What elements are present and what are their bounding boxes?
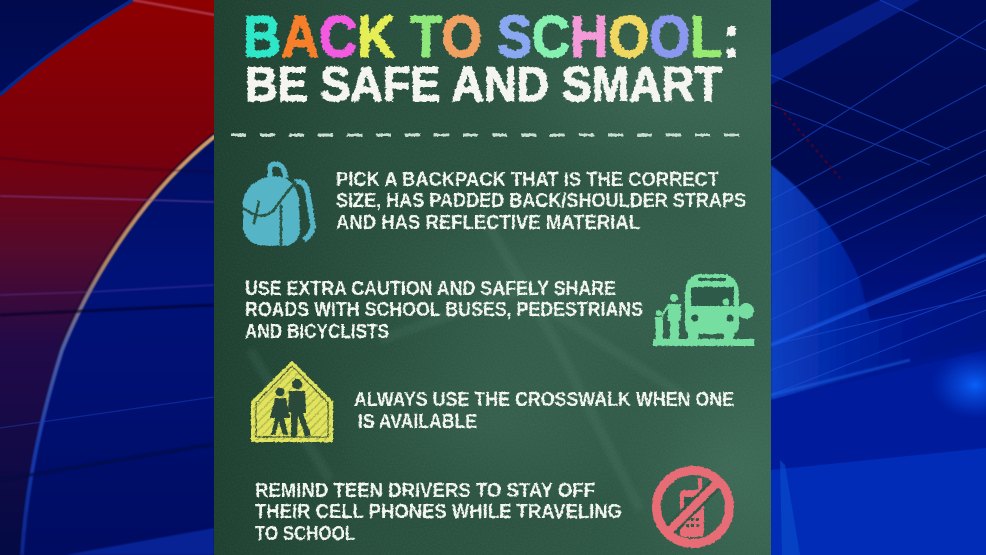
tip 1: backpack text: AND HAS REFLECTIVE MATERIAL [336, 212, 640, 234]
tip 4: teen drivers text: THEIR CELL PHONES WHILE TRAVELING [255, 501, 622, 523]
tip 1: backpack text [336, 169, 746, 234]
icon: backpack [243, 164, 313, 246]
tip 2: road safety text [245, 278, 643, 343]
tip 2: road safety text: AND BICYCLISTS [245, 321, 389, 343]
title line 2: be safe and smart: BE SAFE AND SMART [245, 58, 722, 112]
icon: school bus with pedestrians [653, 274, 754, 346]
chalk dashed divider [231, 134, 750, 136]
tip 2: road safety text: ROADS WITH SCHOOL BUSES, PEDESTRIANS [245, 299, 643, 321]
tip 4: teen drivers text: REMIND TEEN DRIVERS TO STAY OFF [255, 480, 595, 502]
tip 3: crosswalk text: ALWAYS USE THE CROSSWALK WHEN ONE [354, 389, 734, 411]
tip 3: crosswalk text: IS AVAILABLE [358, 411, 477, 433]
tip 1: backpack text: SIZE, HAS PADDED BACK/SHOULDER STRAPS [336, 190, 746, 212]
background: left broadcast panel [0, 0, 215, 555]
tip 3: crosswalk text [354, 389, 734, 433]
background: right broadcast panel [771, 0, 986, 555]
tip 1: backpack text: PICK A BACKPACK THAT IS THE CORRECT [336, 169, 719, 191]
tip 4: teen drivers text [255, 480, 622, 545]
title line 1: back to school: BACK TO SCHOOL: [243, 4, 740, 70]
icon: no cell phones [656, 470, 730, 544]
tip 2: road safety text: USE EXTRA CAUTION AND SAFELY SHARE [245, 278, 616, 300]
icon: school crossing sign [252, 362, 332, 441]
tip 4: teen drivers text: TO SCHOOL [255, 523, 355, 545]
chalkboard panel [214, 0, 771, 555]
